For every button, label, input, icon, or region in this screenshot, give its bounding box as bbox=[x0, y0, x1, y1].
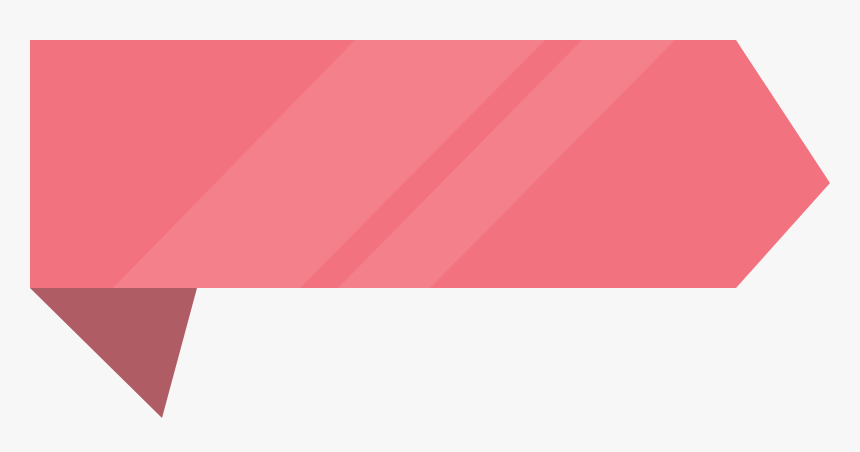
fold: dark triangle under ribbon bbox=[30, 288, 197, 418]
banner: main arrow-shaped ribbon bbox=[30, 40, 830, 288]
